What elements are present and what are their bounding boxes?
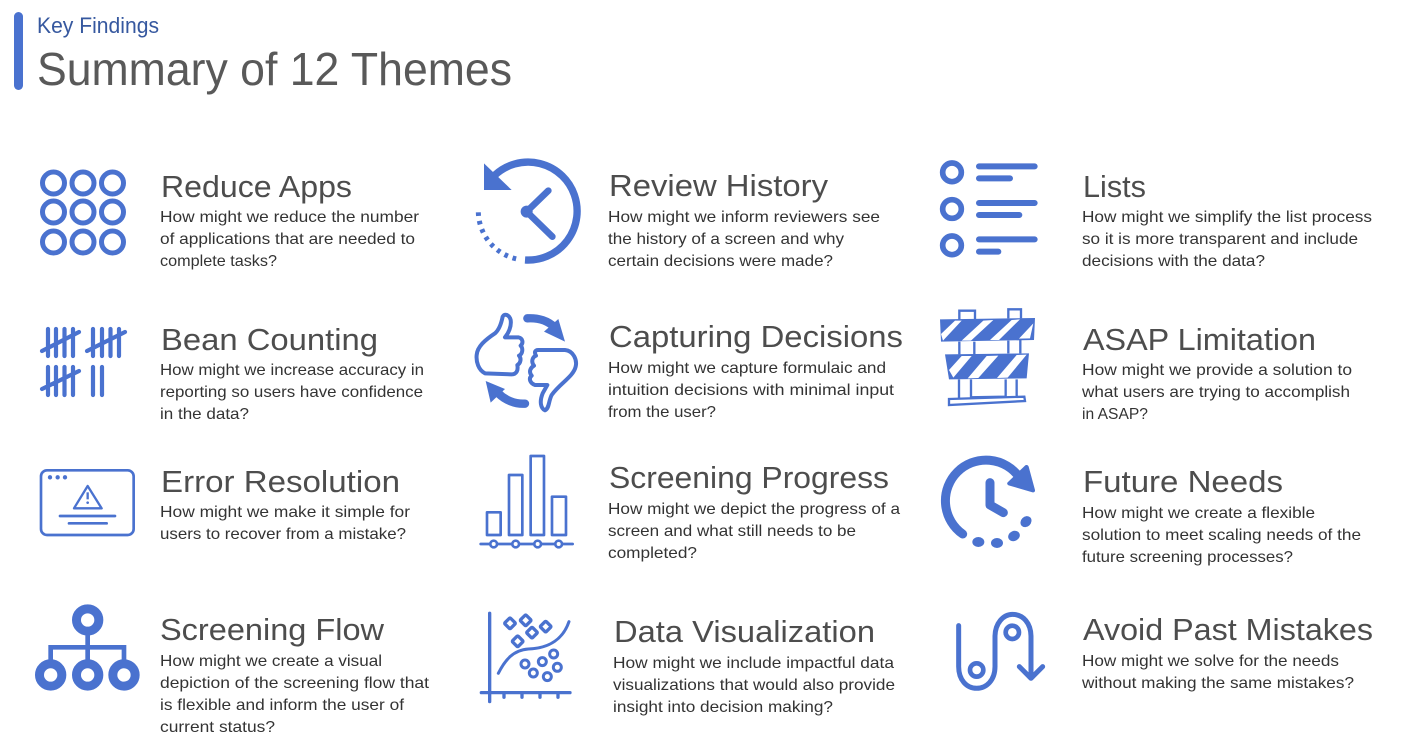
description: current status?	[160, 719, 275, 736]
description	[1082, 209, 1372, 270]
title: Summary of 12 Themes	[37, 43, 512, 95]
heading: Reduce Apps	[161, 169, 352, 204]
icon: browser warning window	[41, 470, 134, 535]
description: How might we make it simple for	[160, 504, 411, 521]
heading: Data Visualization	[614, 614, 875, 649]
description: How might we solve for the needs	[1082, 653, 1339, 670]
description: what users are trying to accomplish	[1081, 384, 1350, 401]
panel: Data Visualization	[481, 613, 895, 716]
icon: bar chart	[481, 456, 573, 547]
icon: app grid	[42, 172, 124, 253]
description: How might we inform reviewers see	[608, 209, 880, 226]
heading: Lists	[1083, 169, 1146, 204]
description: How might we reduce the number	[160, 209, 420, 226]
description: future screening processes?	[1082, 549, 1293, 566]
description: from the user?	[608, 404, 716, 421]
description: certain decisions were made?	[608, 253, 833, 270]
description: in ASAP?	[1082, 406, 1148, 423]
description	[160, 504, 411, 543]
heading: Bean Counting	[161, 322, 378, 357]
description: users to recover from a mistake?	[160, 526, 406, 543]
description	[1081, 362, 1352, 423]
description: intuition decisions with minimal input	[608, 382, 895, 399]
description: How might we simplify the list process	[1082, 209, 1372, 226]
icon: clock with reverse arrow	[478, 162, 577, 260]
panel: Screening Progress	[481, 456, 900, 562]
description	[160, 209, 420, 270]
description: How might we depict the progress of a	[608, 501, 900, 518]
icon: tally marks	[42, 329, 125, 395]
description	[160, 653, 430, 736]
description: screen and what still needs to be	[608, 523, 856, 540]
heading: Future Needs	[1083, 464, 1283, 499]
description: How might we capture formulaic and	[608, 360, 886, 377]
heading: Error Resolution	[161, 464, 400, 499]
description	[608, 501, 900, 562]
description	[608, 360, 895, 421]
heading: Review History	[609, 168, 829, 203]
description: without making the same mistakes?	[1081, 675, 1354, 692]
heading: Screening Flow	[160, 612, 385, 647]
panel: Capturing Decisions	[477, 315, 903, 421]
description: depiction of the screening flow that	[160, 675, 430, 692]
description: so it is more transparent and include	[1082, 231, 1358, 248]
description: visualizations that would also provide	[613, 677, 895, 694]
description	[613, 655, 895, 716]
description: How might we provide a solution to	[1082, 362, 1352, 379]
description: insight into decision making?	[613, 699, 833, 716]
description	[1082, 505, 1361, 566]
heading: Capturing Decisions	[609, 319, 903, 354]
heading: ASAP Limitation	[1083, 322, 1316, 357]
description: decisions with the data?	[1082, 253, 1265, 270]
icon: scatter plot	[481, 613, 570, 702]
description: solution to meet scaling needs of the	[1082, 527, 1361, 544]
description: completed?	[608, 545, 697, 562]
description: complete tasks?	[160, 253, 277, 270]
panel: Reduce Apps	[42, 169, 420, 270]
heading: Avoid Past Mistakes	[1083, 612, 1373, 647]
icon: hierarchy flow	[39, 609, 135, 686]
panel: Error Resolution	[41, 464, 411, 543]
description: is flexible and inform the user of	[160, 697, 405, 714]
description	[160, 362, 424, 423]
panel: Screening Flow	[39, 609, 430, 736]
panel: Lists	[943, 163, 1372, 270]
panel: Avoid Past Mistakes	[959, 612, 1373, 692]
panel: Bean Counting	[42, 322, 424, 423]
description	[1081, 653, 1354, 692]
description: reporting so users have confidence	[160, 384, 423, 401]
description: the history of a screen and why	[608, 231, 844, 248]
icon: winding path arrow	[959, 614, 1043, 688]
icon: thumbs up and down with arrows	[477, 315, 576, 410]
panel: Review History	[478, 162, 880, 270]
description: How might we create a flexible	[1082, 505, 1315, 522]
description	[608, 209, 880, 270]
description: in the data?	[160, 406, 249, 423]
description: of applications that are needed to	[160, 231, 415, 248]
description: How might we create a visual	[160, 653, 382, 670]
panel: Future Needs	[945, 460, 1361, 566]
description: How might we include impactful data	[613, 655, 894, 672]
description: How might we increase accuracy in	[160, 362, 424, 379]
heading: Screening Progress	[609, 460, 889, 495]
icon: clock with forward arrow	[945, 460, 1035, 548]
icon: road barricade	[940, 309, 1035, 405]
eyebrow heading: Key Findings	[37, 13, 159, 38]
icon: bullet list	[943, 163, 1035, 255]
header accent bar	[14, 12, 23, 90]
panel: ASAP Limitation	[940, 309, 1352, 423]
